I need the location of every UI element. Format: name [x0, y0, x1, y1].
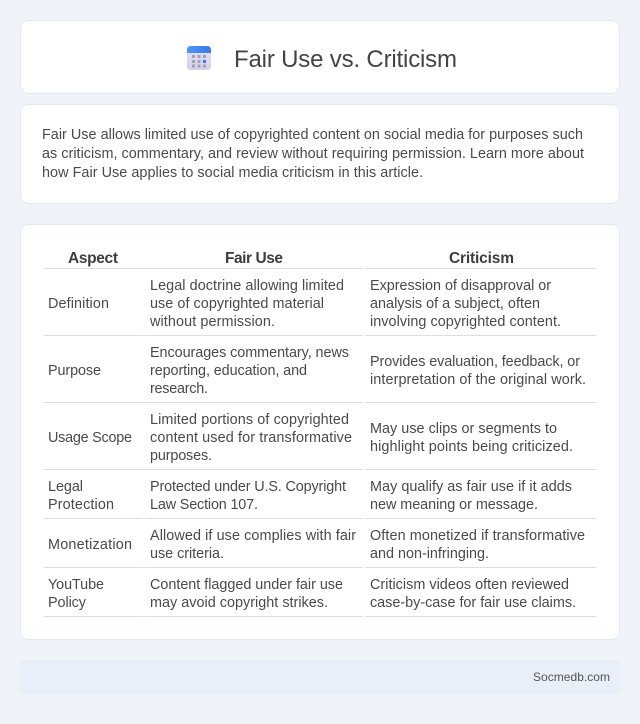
row: Purpose [48, 345, 586, 397]
row: Purpose: Provides evaluation, feedback, or [370, 354, 580, 370]
row: Monetization: and non-infringing. [370, 546, 489, 562]
row: Legal Protection: May qualify as fair use if it adds [370, 479, 572, 495]
row: Definition: analysis of a subject, often [370, 296, 540, 312]
row: Legal Protection: Protection [48, 497, 114, 513]
row: Monetization [48, 528, 585, 562]
table header: Aspect [68, 250, 118, 267]
panel: introduction [20, 104, 620, 204]
row: Monetization: Often monetized if transformative [370, 528, 585, 544]
row: Definition: use of copyrighted material [150, 296, 324, 312]
row: Purpose: interpretation of the original work. [370, 372, 586, 388]
row: Monetization: Allowed if use complies with fair [150, 528, 356, 544]
intro text: as criticism, commentary, and review without requiring permission. Learn more about [42, 146, 584, 162]
row: YouTube Policy: Criticism videos often reviewed [370, 577, 569, 593]
row: Purpose: reporting, education, and [150, 363, 307, 379]
row: YouTube Policy [48, 577, 576, 611]
row: YouTube Policy: YouTube [48, 577, 104, 593]
row: Purpose: Encourages commentary, news [150, 345, 349, 361]
panel: comparison table [20, 224, 620, 640]
row: Purpose: Purpose [48, 363, 101, 379]
table header: Criticism [449, 250, 514, 267]
row: Legal Protection: Protected under U.S. Copyright [150, 479, 346, 495]
title: Fair Use vs. Criticism [234, 46, 457, 73]
row: Definition: involving copyrighted content. [370, 314, 561, 330]
row: Usage Scope: highlight points being criticized. [370, 439, 573, 455]
row: Usage Scope: Limited portions of copyrighted [150, 412, 349, 428]
row: Monetization: use criteria. [150, 546, 224, 562]
row: YouTube Policy: Content flagged under fair use [150, 577, 343, 593]
row: Definition: without permission. [149, 314, 275, 330]
table header [68, 250, 514, 267]
footer [20, 660, 620, 694]
row: Usage Scope [48, 412, 573, 464]
row: Definition [48, 278, 561, 330]
row: Definition: Legal doctrine allowing limited [150, 278, 344, 294]
row: Monetization: Monetization [48, 537, 132, 553]
row: Legal Protection: Law Section 107. [150, 497, 258, 513]
row: Purpose: research. [150, 381, 208, 397]
intro text [42, 127, 584, 181]
row: Usage Scope: Usage Scope [48, 430, 132, 446]
row: YouTube Policy: Policy [48, 595, 87, 611]
row: YouTube Policy: may avoid copyright strikes. [150, 595, 328, 611]
intro text: how Fair Use applies to social media criticism in this article. [42, 165, 423, 181]
row: Usage Scope: purposes. [150, 448, 212, 464]
row: Definition: Definition [48, 296, 109, 312]
table header: Fair Use [225, 250, 283, 267]
row: Legal Protection [48, 479, 572, 513]
row: YouTube Policy: case-by-case for fair use claims. [370, 595, 576, 611]
intro text: Fair Use allows limited use of copyrighted content on social media for purposes such [42, 127, 583, 143]
row: Usage Scope: May use clips or segments to [370, 421, 557, 437]
row: Definition: Expression of disapproval or [370, 278, 551, 294]
panel: title card [20, 20, 620, 94]
icon: calendar [187, 46, 211, 70]
row: Usage Scope: content used for transformative [150, 430, 352, 446]
row: Legal Protection: Legal [48, 479, 83, 495]
footer source text: Socmedb.com [533, 670, 610, 684]
row: Legal Protection: new meaning or message. [370, 497, 538, 513]
